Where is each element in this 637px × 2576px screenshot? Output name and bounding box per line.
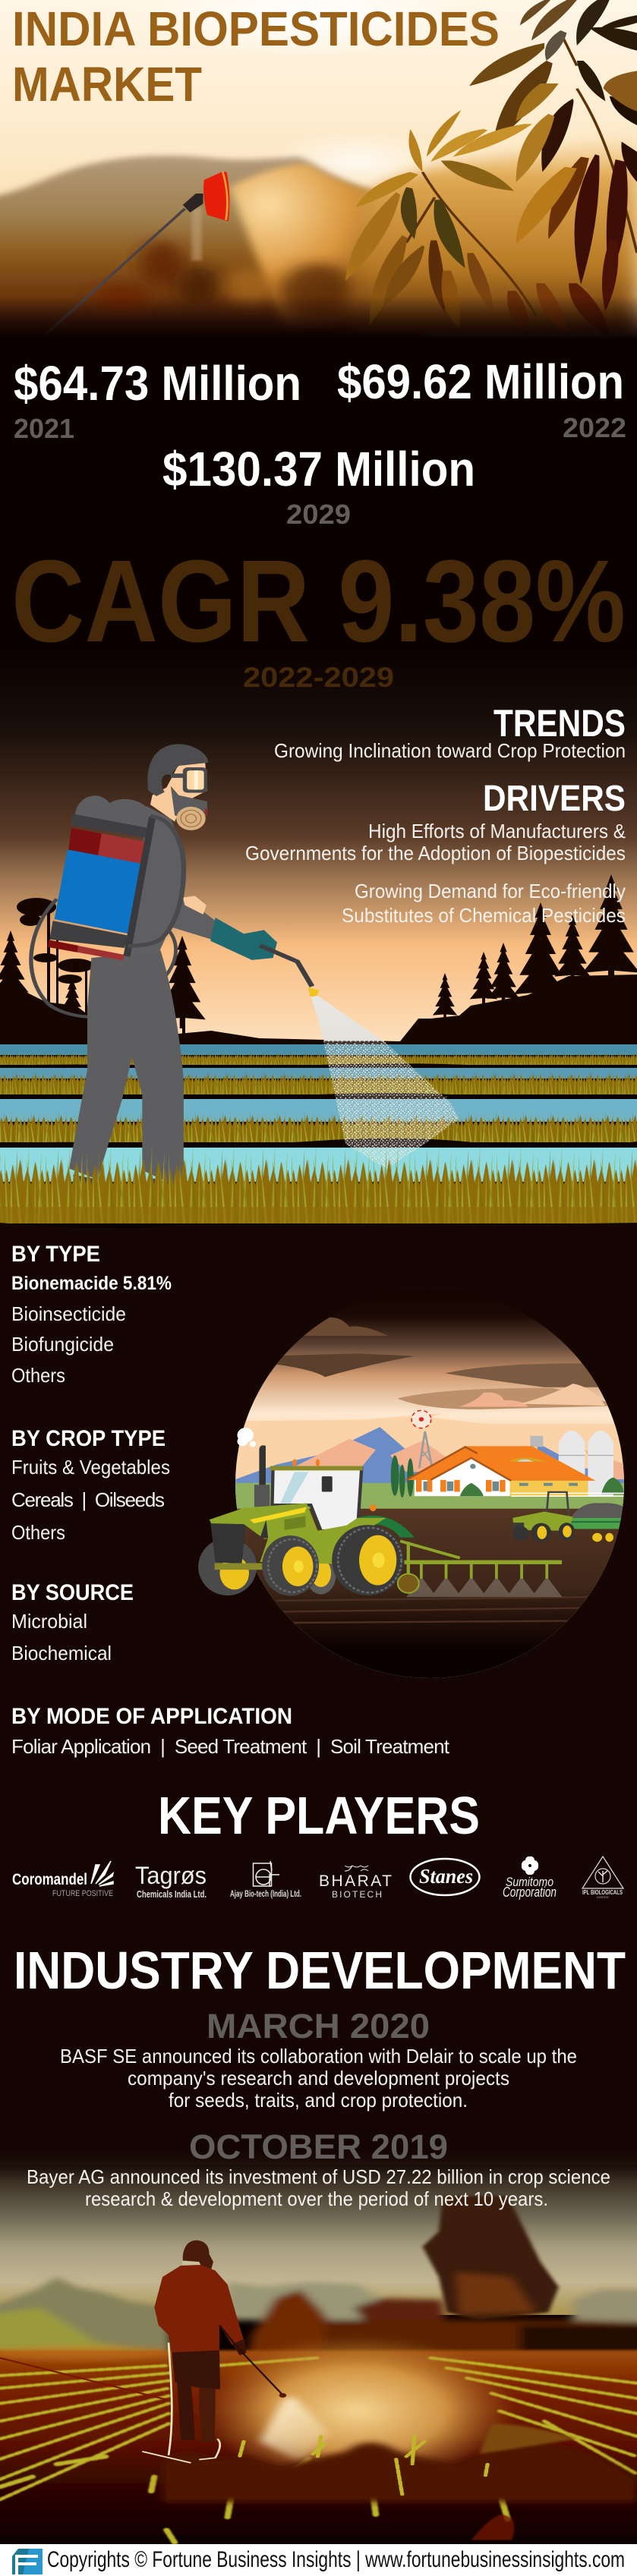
logo: IPL Biologicals xyxy=(582,1856,623,1899)
crop rows xyxy=(0,2358,637,2543)
segment: by mode of application: Foliar Application | Seed Treatment | Soil Treatment xyxy=(11,1735,450,1758)
segment: by type: Bionemacide 5.81% xyxy=(11,1273,172,1294)
segment: by type: Others xyxy=(11,1364,65,1387)
segment: by source xyxy=(11,1580,134,1664)
farmer with backpack sprayer xyxy=(31,744,320,1209)
logo: Coromandel xyxy=(12,1861,113,1898)
hero photo: spraying plants xyxy=(0,0,637,359)
logo: Ajay Bio-tech xyxy=(230,1861,301,1899)
trends and drivers text xyxy=(245,702,626,927)
segment: by crop type xyxy=(11,1426,170,1544)
footer bar xyxy=(0,2544,637,2576)
key player logos xyxy=(12,1856,623,1900)
segment: by source: Microbial xyxy=(11,1610,87,1633)
logo: Bharat Biotech: BIOTECH xyxy=(332,1889,382,1900)
stat: 2029 value: 2029 xyxy=(286,499,351,530)
segment: by source: BY SOURCE xyxy=(11,1580,134,1605)
development: October 2019: OCTOBER 2019 xyxy=(189,2127,448,2166)
segment: by source: Biochemical xyxy=(11,1642,112,1664)
segment: by crop type: BY CROP TYPE xyxy=(11,1426,166,1451)
mountains xyxy=(235,1427,626,1487)
water and grass bands xyxy=(0,1044,637,1182)
stat: 2021 value: 2021 xyxy=(14,413,74,444)
windmill xyxy=(412,1410,432,1468)
drivers: High Efforts of Manufacturers & xyxy=(368,820,626,842)
small tractor and trailer xyxy=(512,1492,637,1542)
cypress trees xyxy=(391,1455,414,1497)
sprayer nozzle and lance xyxy=(41,172,229,339)
illustration: spraying landscape xyxy=(0,744,637,1233)
segment: by mode of application xyxy=(11,1704,450,1758)
development: March 2020 xyxy=(60,2007,577,2112)
stat: 2029 value xyxy=(162,442,475,530)
stat: 2021 value: $64.73 Million xyxy=(14,356,301,411)
logo: Ajay Bio-tech: Ajay Bio-tech (India) Ltd. xyxy=(230,1888,301,1899)
logo: IPL Biologicals: LIMITED xyxy=(597,1895,609,1899)
key players heading: KEY PLAYERS xyxy=(158,1786,480,1845)
development: October 2019 xyxy=(27,2127,610,2210)
logo: Bharat Biotech: BHARAT xyxy=(319,1872,392,1890)
logo: Stanes xyxy=(410,1859,480,1895)
silos xyxy=(530,1431,613,1496)
logo: Sumitomo Corporation: Corporation xyxy=(503,1885,557,1900)
tractor circle illustration xyxy=(198,1318,624,1678)
development: March 2020: company's research and development projects xyxy=(128,2067,509,2089)
farmhouse xyxy=(406,1446,637,1496)
trends xyxy=(274,702,626,762)
development: March 2020: MARCH 2020 xyxy=(207,2007,430,2045)
footer logo xyxy=(12,2549,43,2574)
foreground grass xyxy=(0,1146,637,1223)
segment: by type: Bioinsecticide xyxy=(11,1302,126,1325)
logo: Bharat Biotech xyxy=(319,1866,392,1900)
logo: Sumitomo Corporation: Sumitomo xyxy=(506,1875,553,1889)
title xyxy=(12,2,500,112)
development: October 2019: research & development over the period of next 10 years. xyxy=(85,2187,548,2210)
logo: Stanes: Stanes xyxy=(419,1865,473,1888)
logo: Tagros: Chemicals India Ltd. xyxy=(137,1888,207,1900)
segment: by mode of application: BY MODE OF APPLICATION xyxy=(11,1704,292,1729)
drivers xyxy=(245,779,626,927)
logo: Sumitomo Corporation xyxy=(503,1856,557,1900)
logo: Tagros xyxy=(135,1862,207,1900)
blurred tree line xyxy=(0,2277,637,2363)
CAGR headline: 2022-2029 xyxy=(243,662,394,693)
segment: by crop type: Cereals | Oilseeds xyxy=(11,1488,165,1511)
segment: by type: Biofungicide xyxy=(11,1333,114,1356)
distant tree silhouettes xyxy=(0,874,637,1053)
title: MARKET xyxy=(12,57,202,112)
stat: 2022 value xyxy=(337,354,626,443)
stat: 2029 value: $130.37 Million xyxy=(162,442,475,496)
bottom photo: farmer spraying field xyxy=(0,2148,637,2548)
drivers: Substitutes of Chemical Pesticides xyxy=(342,904,626,927)
spray cone xyxy=(311,996,459,1169)
segment: by type: BY TYPE xyxy=(11,1242,100,1267)
seeder implement with spray xyxy=(398,1541,563,1597)
soil mounds xyxy=(162,2423,637,2502)
logo: Coromandel: FUTURE POSITIVE xyxy=(52,1889,113,1898)
big tractor xyxy=(198,1428,415,1596)
logo: IPL Biologicals: IPL BIOLOGICALS xyxy=(582,1889,623,1896)
segment: by type xyxy=(11,1242,172,1387)
development: March 2020: BASF SE announced its collaboration with Delair to scale up the xyxy=(60,2045,577,2067)
segment: by crop type: Others xyxy=(11,1521,65,1544)
plant leaves xyxy=(345,0,637,336)
stat: 2022 value: 2022 xyxy=(563,412,626,443)
farmer silhouette xyxy=(0,2241,286,2463)
mist cloud xyxy=(199,2328,516,2480)
clouds xyxy=(235,1317,637,1450)
title: INDIA BIOPESTICIDES xyxy=(12,2,500,56)
logo: Tagros: Tagrøs xyxy=(135,1862,207,1889)
logo: Coromandel: Coromandel xyxy=(12,1871,87,1888)
segmentation section background xyxy=(0,1231,637,2165)
development: March 2020: for seeds, traits, and crop protection. xyxy=(169,2089,468,2112)
page background xyxy=(0,0,637,1044)
stat: 2021 value xyxy=(14,356,301,444)
segment: by crop type: Fruits & Vegetables xyxy=(11,1456,170,1479)
